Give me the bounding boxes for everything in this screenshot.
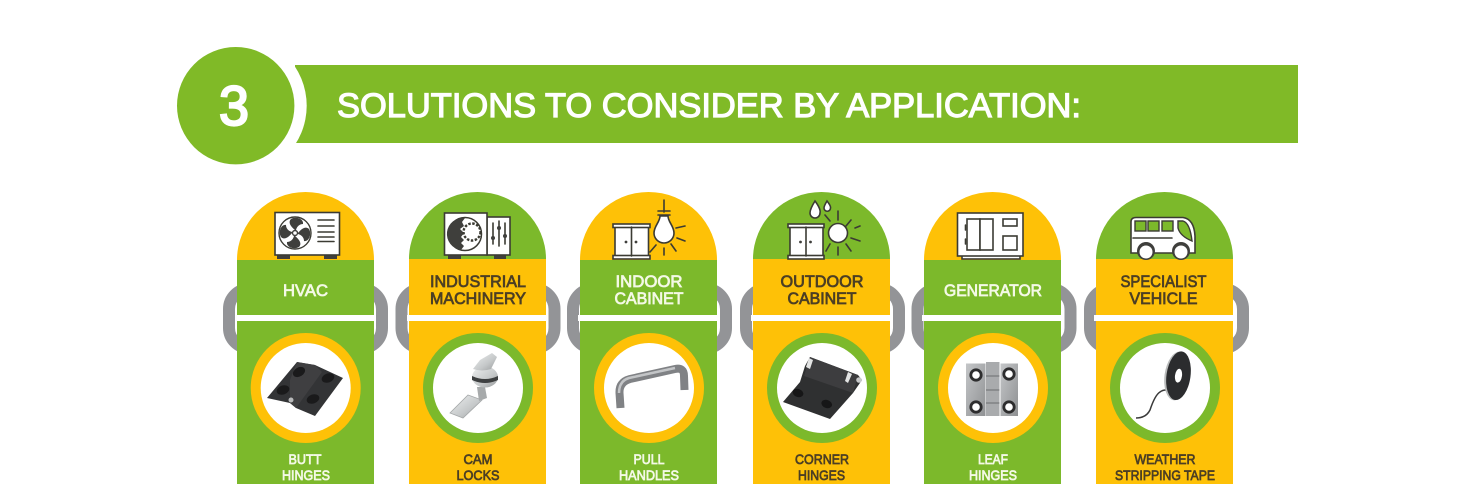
panel: specialist vehicle / weather stripping tape: [1094, 192, 1235, 484]
label: specialist vehicle: SPECIALIST: [1120, 273, 1206, 291]
label: weather stripping tape: WEATHER: [1134, 451, 1196, 467]
icon: generator: [958, 213, 1023, 259]
label: corner hinges: CORNER: [795, 451, 849, 467]
label: outdoor cabinet: CABINET: [788, 290, 856, 308]
panel: HVAC / butt hinges: [235, 192, 376, 484]
icon: cabinet with light bulb: [613, 200, 685, 259]
product ring: corner hinge: [767, 333, 877, 443]
panel: indoor cabinet / pull handles: [578, 192, 719, 484]
label: indoor cabinet: [614, 273, 684, 308]
chain links: [229, 289, 1243, 348]
label: weather stripping tape: STRIPPING TAPE: [1115, 467, 1215, 483]
product ring: pull handle: [594, 333, 704, 443]
label: corner hinges: [795, 451, 849, 483]
label: leaf hinges: LEAF: [978, 451, 1008, 467]
header banner: [165, 35, 1298, 177]
panel: outdoor cabinet / corner hinges: [751, 192, 892, 484]
product ring: weather stripping tape: [1110, 333, 1220, 443]
label: outdoor cabinet: [780, 273, 864, 308]
label: industrial machinery: [430, 273, 526, 308]
product ring: butt hinge: [251, 333, 361, 443]
label: outdoor cabinet: OUTDOOR: [780, 273, 864, 291]
title: SOLUTIONS TO CONSIDER BY APPLICATION:: [337, 87, 1081, 125]
label: pull handles: HANDLES: [619, 467, 679, 483]
label: butt hinges: HINGES: [282, 467, 330, 483]
label: butt hinges: [282, 451, 330, 483]
product ring: leaf hinge: [938, 333, 1048, 443]
label: generator: GENERATOR: [944, 282, 1042, 300]
label: specialist vehicle: VEHICLE: [1130, 290, 1198, 308]
icon: cabinet with sun and rain: [788, 201, 860, 259]
label: industrial machinery: MACHINERY: [430, 290, 526, 308]
label: cam locks: CAM: [464, 451, 492, 467]
step number badge: 3: [219, 74, 249, 137]
label: cam locks: LOCKS: [456, 467, 500, 483]
label: indoor cabinet: CABINET: [614, 290, 684, 308]
label: leaf hinges: HINGES: [969, 467, 1017, 483]
label: weather stripping tape: [1115, 451, 1215, 483]
label: indoor cabinet: INDOOR: [616, 273, 683, 291]
label: leaf hinges: [969, 451, 1017, 483]
product ring: cam lock: [423, 333, 533, 443]
label: pull handles: PULL: [634, 451, 665, 467]
icon: HVAC unit: [275, 212, 340, 259]
panel: generator / leaf hinges: [922, 192, 1063, 484]
label: pull handles: [619, 451, 679, 483]
label: cam locks: [456, 451, 500, 483]
label: corner hinges: HINGES: [798, 467, 845, 483]
label: industrial machinery: INDUSTRIAL: [430, 273, 526, 291]
panel: industrial machinery / cam locks: [407, 192, 548, 484]
icon: bus: [1131, 218, 1195, 260]
label: butt hinges: BUTT: [288, 451, 322, 467]
label: specialist vehicle: [1120, 273, 1206, 308]
step number badge: [177, 47, 294, 164]
label: HVAC: HVAC: [283, 281, 328, 300]
icon: industrial machine: [444, 213, 510, 259]
